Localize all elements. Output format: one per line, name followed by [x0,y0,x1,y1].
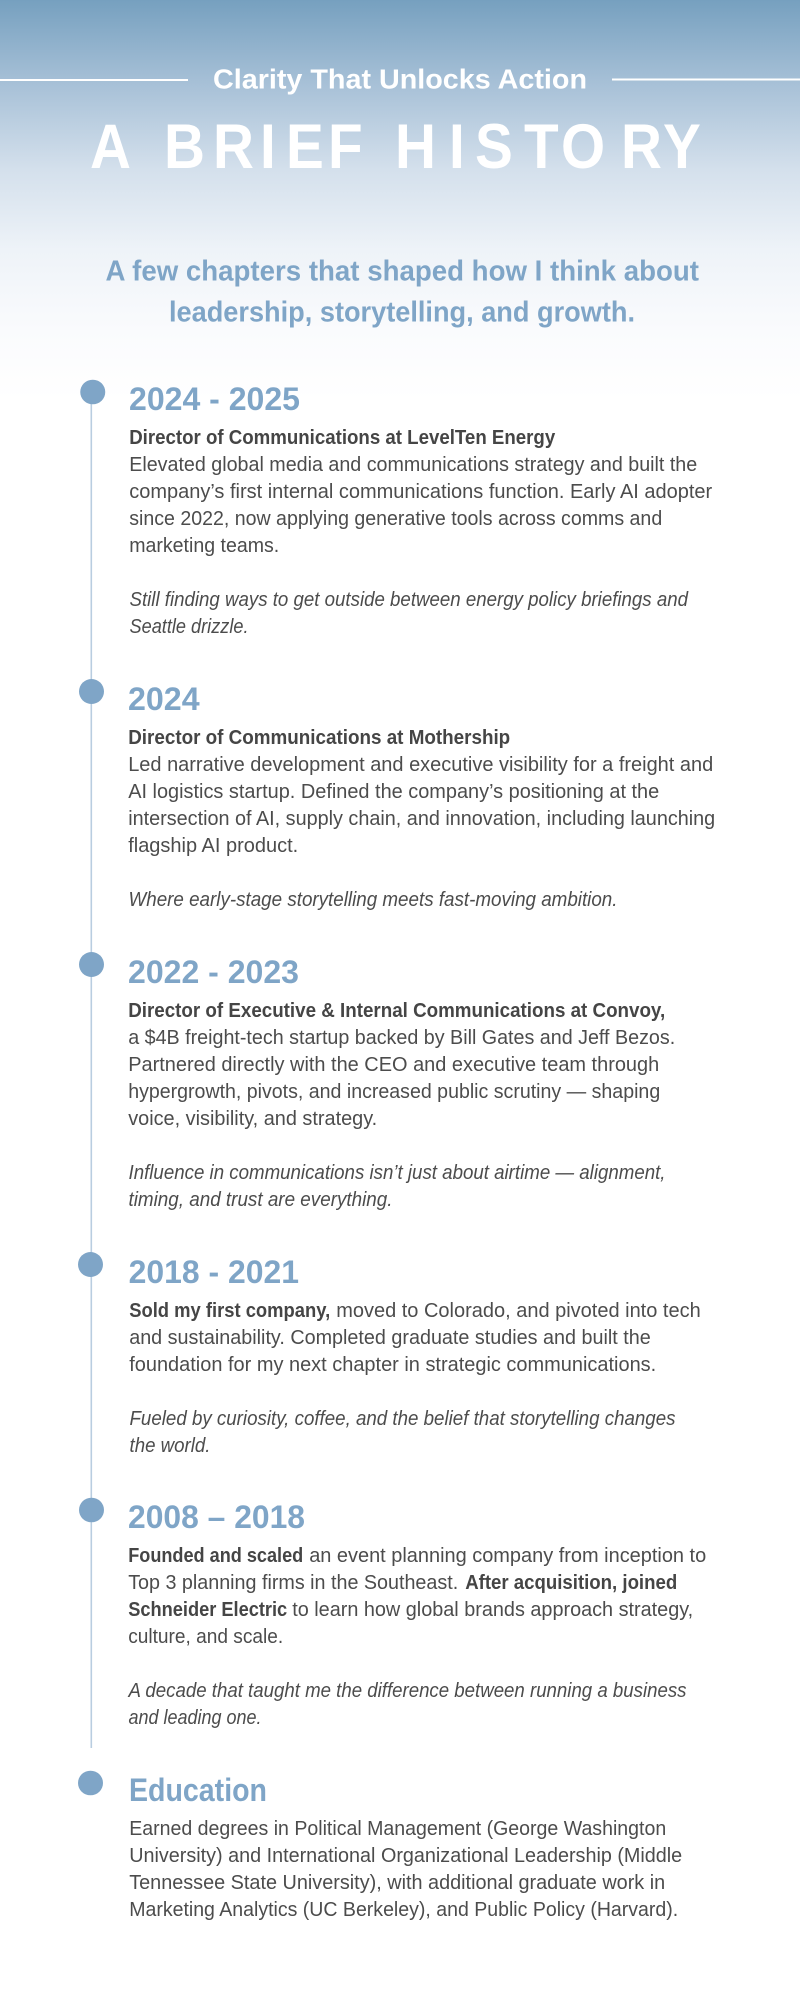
description: Earned degrees in Political Management (George Washington [129,1818,666,1840]
section heading: Education [129,1772,267,1808]
marker dot [79,952,104,977]
description: culture, and scale. [128,1626,283,1648]
title: A BRIEF HISTORY [90,111,701,182]
year heading: 2022 - 2023 [128,954,299,990]
header gradient band [0,0,800,400]
description [129,1818,682,1921]
italic note [130,589,689,638]
description: since 2022, now applying generative tools across comms and [129,508,662,530]
description: hypergrowth, pivots, and increased public scrutiny — shaping [128,1081,660,1103]
timeline entry: 2024 [79,679,715,911]
description: University) and International Organizational Leadership (Middle [129,1845,682,1867]
italic note: Seattle drizzle. [130,616,248,638]
italic note: and leading one. [128,1707,262,1729]
role: Director of Communications at Mothership [128,727,510,749]
intro statement: A few chapters that shaped how I think about [106,256,699,288]
italic note: A decade that taught me the difference between running a business [128,1680,687,1702]
description: to learn how global brands approach strategy, [292,1599,693,1621]
description: Led narrative development and executive visibility for a freight and [128,754,713,776]
timeline entry: 2024 - 2025 [80,380,713,638]
marker dot [78,1771,103,1795]
italic note: Fueled by curiosity, coffee, and the belief that storytelling changes [130,1408,676,1430]
year heading: 2008 – 2018 [128,1499,305,1535]
role: Director of Communications at LevelTen Energy [129,427,556,449]
description: Top 3 planning firms in the Southeast. [128,1572,458,1594]
role: Director of Executive & Internal Communications at Convoy, [128,1000,665,1022]
italic note: Influence in communications isn’t just about airtime — alignment, [128,1162,666,1184]
description: Sold my first company, [129,1300,330,1322]
description: Schneider Electric [128,1599,287,1621]
description: marketing teams. [129,535,279,557]
italic note [128,1680,687,1729]
italic note: Still finding ways to get outside between energy policy briefings and [130,589,689,611]
timeline entry: 2022 - 2023 [79,952,675,1211]
intro statement: leadership, storytelling, and growth. [169,296,635,328]
description: an event planning company from inception to [309,1545,706,1567]
description: and sustainability. Completed graduate studies and built the [129,1327,651,1349]
description [128,1027,675,1130]
description: Founded and scaled [128,1545,303,1567]
year heading: 2024 - 2025 [129,381,300,417]
intro statement [106,256,699,328]
description: voice, visibility, and strategy. [128,1108,377,1130]
marker dot [79,1498,104,1522]
description: a $4B freight-tech startup backed by Bill Gates and Jeff Bezos. [128,1027,675,1049]
description [129,454,713,557]
description: intersection of AI, supply chain, and innovation, including launching [128,808,715,830]
italic note: timing, and trust are everything. [128,1189,392,1211]
description: moved to Colorado, and pivoted into tech [336,1300,701,1322]
timeline vertical line [90,392,92,1748]
timeline entry: 2018 - 2021 [78,1252,701,1457]
description: Elevated global media and communications strategy and built the [129,454,697,476]
description: flagship AI product. [128,835,298,857]
marker dot [79,679,104,704]
description [129,1300,701,1376]
year heading: 2018 - 2021 [129,1254,299,1290]
marker dot [78,1252,103,1277]
description: AI logistics startup. Defined the company’s positioning at the [128,781,659,803]
description: Tennessee State University), with additional graduate work in [129,1872,665,1894]
year heading: 2024 [128,681,200,717]
description [128,754,715,857]
description: company’s first internal communications function. Early AI adopter [129,481,713,503]
header subtitle with side rules: Clarity That Unlocks Action [213,64,587,94]
description: After acquisition, joined [465,1572,677,1594]
description: Marketing Analytics (UC Berkeley), and Public Policy (Harvard). [129,1899,678,1921]
marker dot [80,380,105,404]
italic note: Where early-stage storytelling meets fast-moving ambition. [128,889,618,911]
timeline entry: 2008 – 2018 [79,1498,706,1729]
italic note [128,1162,666,1211]
timeline entry: Education [78,1771,682,1921]
description: foundation for my next chapter in strategic communications. [129,1354,656,1376]
italic note: the world. [130,1435,210,1457]
description: Partnered directly with the CEO and executive team through [128,1054,659,1076]
description [128,1545,706,1648]
italic note [130,1408,676,1457]
